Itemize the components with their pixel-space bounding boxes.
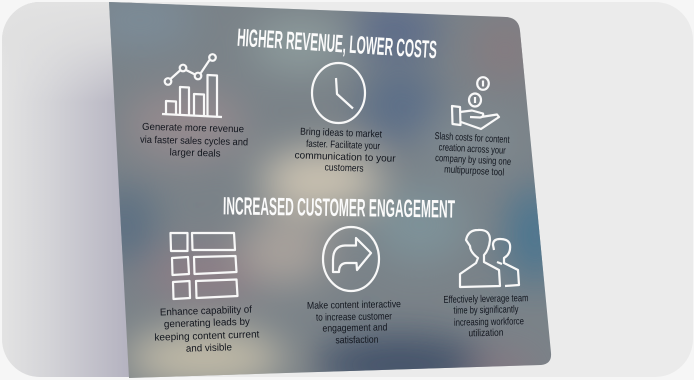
panel background <box>85 0 563 380</box>
text: leverage team time: time by significantly <box>453 304 519 317</box>
icon: clock <box>312 63 365 123</box>
text: bring ideas to market: Bring ideas to market <box>300 127 382 140</box>
text: slash costs: multipurpose tool <box>444 164 504 179</box>
icon: arrow in circle <box>323 227 379 291</box>
icon: two people <box>460 230 519 287</box>
content: HIGHER REVENUE, LOWER COSTS <box>236 24 438 64</box>
tilted panel <box>85 0 563 380</box>
icon: table list <box>170 233 238 299</box>
text: slash costs: company by using one <box>435 153 512 168</box>
text: generate revenue: larger deals <box>169 147 221 160</box>
text: leverage team time <box>443 293 529 339</box>
text: enhance capability: generating leads by <box>164 317 250 330</box>
text: leverage team time: utilization <box>468 328 504 339</box>
text: make content interactive: engagement and <box>322 322 388 335</box>
text: leverage team time: Effectively leverage team <box>443 293 529 306</box>
text: bring ideas to market: faster. Facilitate your <box>306 139 381 152</box>
text: generate revenue: via faster sales cycles and <box>140 135 248 148</box>
text: make content interactive: satisfaction <box>335 335 379 346</box>
text: make content interactive: Make content interactive <box>307 299 401 312</box>
content <box>140 24 529 355</box>
text: make content interactive <box>307 299 401 346</box>
text: make content interactive: to increase customer <box>316 311 393 324</box>
text: bring ideas to market <box>294 127 396 175</box>
content: INCREASED CUSTOMER ENGAGEMENT <box>223 192 455 224</box>
icon: bar chart <box>162 54 222 117</box>
text: enhance capability <box>154 305 260 355</box>
text: enhance capability: Enhance capability of <box>160 305 252 318</box>
text: slash costs <box>434 131 512 179</box>
text: slash costs: Slash costs for content <box>434 131 510 146</box>
text: slash costs: creation across your <box>438 142 506 157</box>
text: leverage team time: increasing workforce <box>454 316 524 329</box>
icon: hand with coins <box>452 77 499 129</box>
text: generate revenue: Generate more revenue <box>142 122 245 135</box>
text: generate revenue <box>140 122 248 160</box>
text: bring ideas to market: communication to your <box>294 150 396 165</box>
text: enhance capability: keeping content current <box>154 329 260 344</box>
text: enhance capability: and visible <box>186 342 232 355</box>
text: bring ideas to market: customers <box>324 162 364 175</box>
